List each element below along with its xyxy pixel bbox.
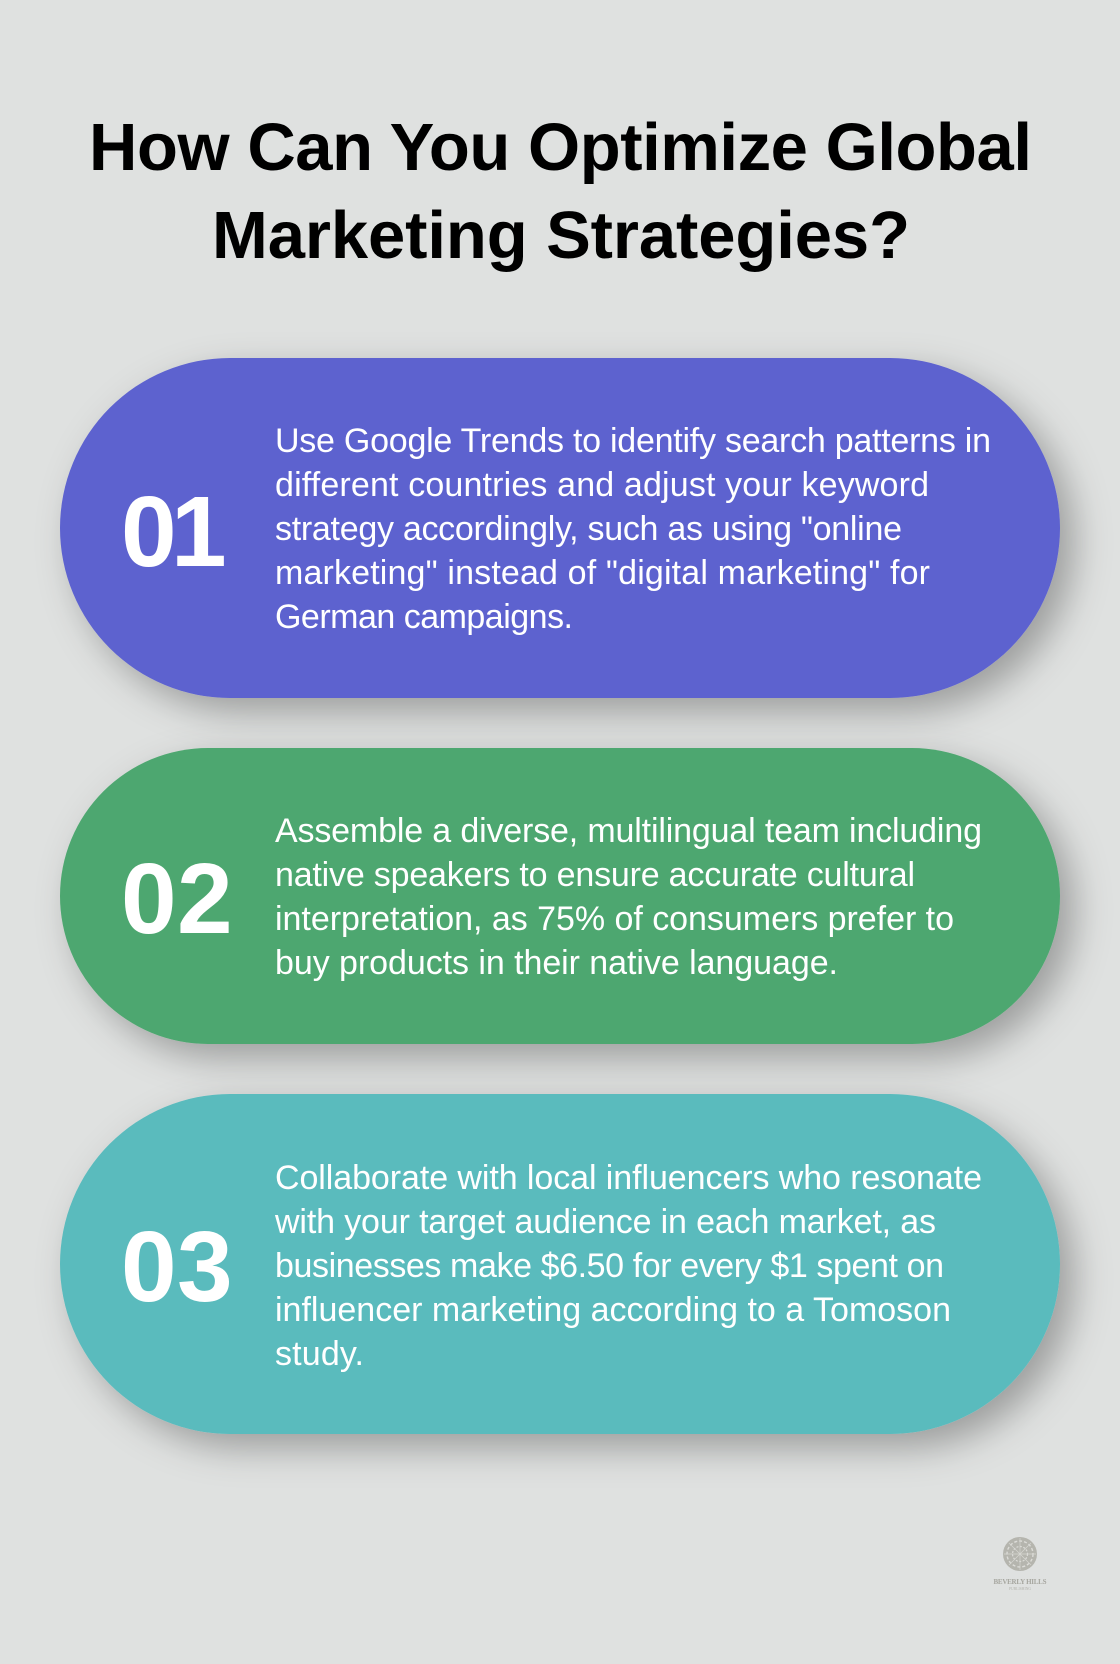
text block 01 (275, 422, 991, 636)
title (89, 110, 1032, 273)
text block 03: businesses make $6.50 for every $1 spent on (275, 1247, 944, 1285)
title: How Can You Optimize Global (89, 110, 1032, 185)
number 03: 03 (121, 1211, 233, 1323)
text block 03: influencer marketing according to a Tomoson (275, 1291, 951, 1329)
text block 02: Assemble a diverse, multilingual team including (275, 812, 982, 850)
panel: step 02 (60, 748, 1060, 1044)
text block 03 (274, 1159, 982, 1373)
panel: step 01 (60, 358, 1060, 698)
text block 01: German campaigns. (275, 598, 573, 636)
text block 01: different countries and adjust your keyword (275, 466, 929, 504)
pill background 03 (60, 1094, 1060, 1434)
text block 03: with your target audience in each market, as (274, 1203, 936, 1241)
text block 03: Collaborate with local influencers who resonate (275, 1159, 982, 1197)
pill background 01 (60, 358, 1060, 698)
text block 01: strategy accordingly, such as using "online (275, 510, 902, 548)
pill background 02 (60, 748, 1060, 1044)
text block 02: interpretation, as 75% of consumers prefer to (275, 900, 954, 938)
logo: Beverly Hills Publishing (994, 1537, 1047, 1591)
text block 03: study. (275, 1335, 364, 1373)
logo text: BEVERLY HILLS (994, 1578, 1047, 1586)
text block 02 (275, 812, 982, 982)
logo subtext: PUBLISHING (1009, 1587, 1031, 1591)
panel: step 03 (60, 1094, 1060, 1434)
icon: ornamental medallion (1003, 1537, 1037, 1571)
text block 01: marketing" instead of "digital marketing" for (275, 554, 930, 592)
number 02: 02 (121, 843, 233, 955)
title: Marketing Strategies? (212, 198, 910, 273)
text block 02: buy products in their native language. (275, 944, 838, 982)
number 01: 01 (121, 476, 227, 588)
text block 02: native speakers to ensure accurate cultural (275, 856, 915, 894)
text block 01: Use Google Trends to identify search patterns in (275, 422, 991, 460)
